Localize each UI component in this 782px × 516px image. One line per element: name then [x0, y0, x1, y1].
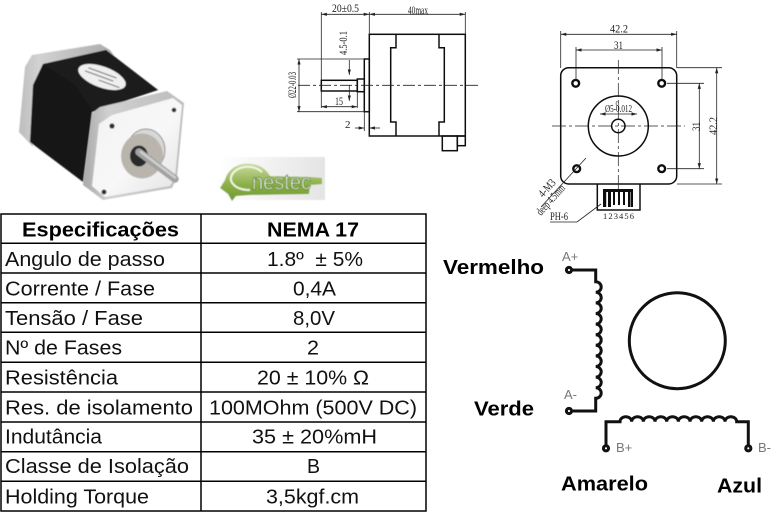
row: holding torque: 3,5kgf.cm — [266, 486, 359, 508]
motor body side — [30, 50, 158, 182]
dimension 2: 2 — [345, 119, 350, 131]
motor label — [75, 59, 129, 95]
terminal B-: B- — [758, 440, 771, 455]
logo background — [218, 157, 325, 200]
screw holes — [572, 80, 665, 172]
logo name: nestec — [252, 170, 311, 194]
row: current — [5, 279, 337, 301]
motor photo — [19, 44, 184, 200]
header: specifications: Especificações — [22, 220, 179, 242]
coil A — [571, 270, 601, 411]
dimension 40: 40max — [408, 5, 428, 17]
dimension 31 right: 31 — [691, 122, 703, 131]
front plate — [83, 91, 184, 200]
terminal A-: A- — [564, 387, 577, 402]
row: voltage — [5, 308, 336, 330]
row: insulation resistance — [5, 397, 417, 419]
shaft highlight — [141, 152, 175, 178]
dimension 42.2 right: 42.2 — [708, 117, 720, 135]
row: resistance: Resistência — [5, 368, 119, 390]
wiring diagram — [443, 249, 771, 498]
row: resistance — [5, 368, 369, 390]
flange circles — [588, 96, 648, 156]
dimension shaft diameter: Ø22-0.03 — [287, 72, 299, 98]
hub face — [121, 134, 163, 178]
row: insulation resistance: 100MOhm (500V DC) — [209, 397, 417, 419]
row: inductance — [5, 426, 377, 448]
wire label: red: Vermelho — [443, 257, 544, 279]
side view dimensions — [297, 12, 465, 136]
connector type: PH-6 — [550, 211, 568, 223]
terminals — [566, 267, 751, 451]
header: NEMA 17: NEMA 17 — [267, 220, 359, 242]
logo — [218, 157, 325, 201]
terminal B+: B+ — [616, 440, 632, 455]
wire label: yellow: Amarelo — [561, 474, 648, 496]
wire label: green: Verde — [474, 398, 534, 420]
row: phases: 2 — [307, 338, 319, 360]
row: insulation resistance: Res. de isolamento — [5, 397, 193, 419]
row: inductance: 35 ± 20%mH — [252, 426, 377, 448]
side view center line — [298, 84, 479, 86]
side view drawing — [287, 3, 479, 151]
wire label: blue: Azul — [717, 476, 762, 498]
row: voltage: Tensão / Fase — [5, 308, 143, 330]
row: inductance: Indutância — [5, 426, 103, 448]
motor body top highlight — [43, 50, 158, 110]
row: insulation class: B — [307, 456, 320, 478]
rotor circle — [629, 293, 725, 389]
coil B — [606, 417, 748, 446]
dimension bore: Ø5-0.012 — [605, 104, 632, 115]
dimension 4.5: 4.5-0.1 — [338, 31, 350, 55]
connector — [597, 184, 640, 210]
logo emblem — [220, 164, 322, 201]
row: resistance: 20 ± 10% Ω — [257, 368, 369, 390]
row: step angle: Angulo de passo — [5, 249, 165, 271]
row: voltage: 8,0V — [293, 308, 336, 330]
mounting holes — [102, 108, 176, 194]
dimension 15: 15 — [335, 96, 343, 108]
row: insulation class: Classe de Isolação — [5, 456, 189, 478]
mounting plate — [561, 68, 677, 184]
dimension 31 top: 31 — [614, 40, 623, 52]
dimension 20: 20±0.5 — [332, 3, 359, 15]
row: current: Corrente / Fase — [5, 279, 155, 301]
front face — [92, 98, 182, 197]
row: holding torque: Holding Torque — [5, 486, 149, 508]
row: step angle — [5, 249, 363, 271]
label print — [84, 67, 122, 88]
thread note: 4-M3 — [536, 177, 559, 200]
table grid — [1, 214, 426, 511]
center lines — [552, 60, 685, 195]
row: step angle: 1.8º ± 5% — [267, 249, 363, 271]
dimension zero: 0 — [616, 100, 620, 108]
row: holding torque — [5, 486, 359, 508]
shaft — [139, 152, 175, 179]
front view drawing — [534, 24, 722, 223]
back flange — [19, 44, 117, 147]
dimension 42.2 top: 42.2 — [610, 24, 628, 36]
depth note: deep 4.5mm — [534, 182, 568, 218]
row: phases — [5, 338, 319, 360]
row: current: 0,4A — [293, 279, 337, 301]
hub hole — [130, 146, 148, 166]
pin numbers: 123456 — [603, 211, 634, 221]
terminal A+: A+ — [562, 249, 578, 264]
connector pins — [603, 189, 633, 207]
motor outline — [321, 34, 465, 151]
specifications table — [1, 214, 426, 511]
row: insulation class — [5, 456, 320, 478]
flange ring — [127, 129, 165, 171]
row: phases: Nº de Fases — [5, 338, 122, 360]
front view dimensions — [541, 31, 722, 222]
logo ring — [231, 167, 262, 190]
